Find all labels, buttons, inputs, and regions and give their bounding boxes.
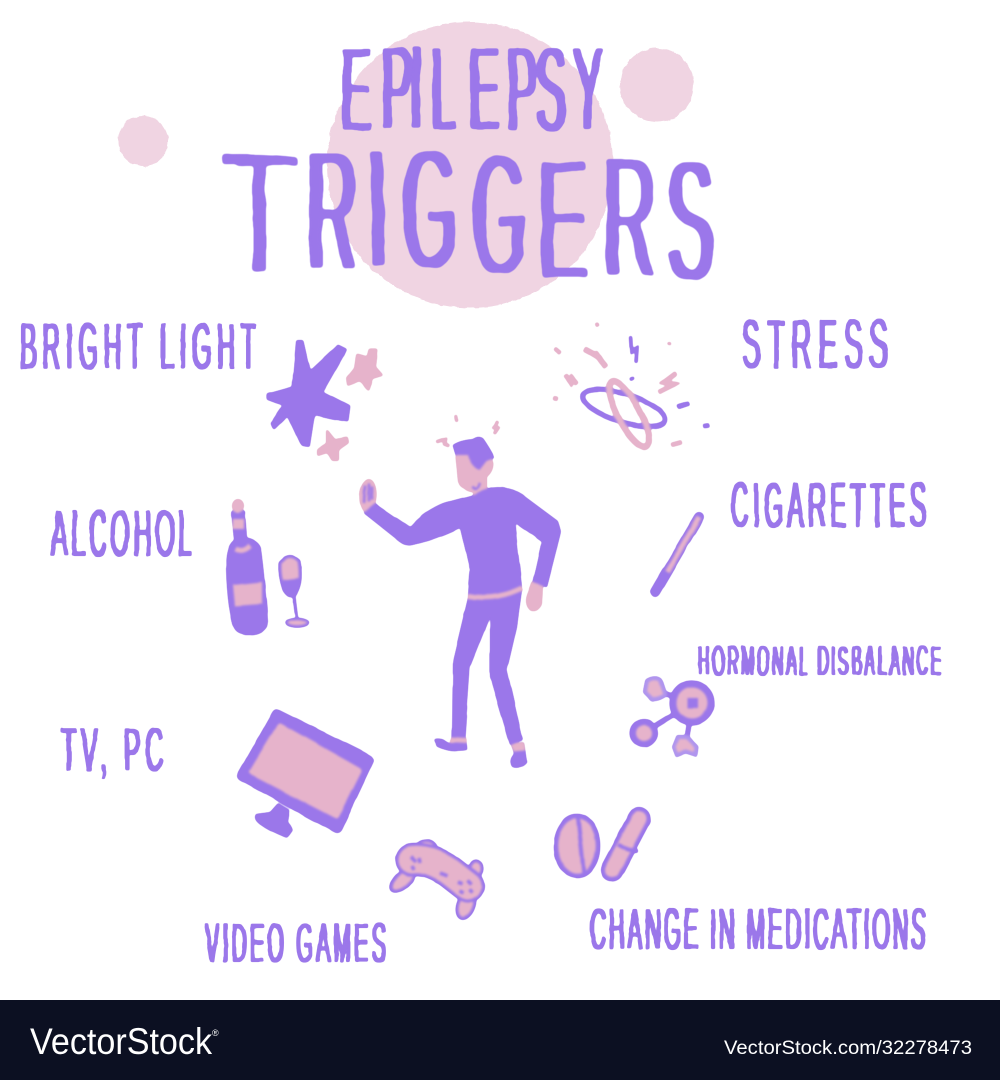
label: hormonal disbalance: HORMONAL DISBALANCE [698, 637, 941, 684]
icon: cigarette [655, 517, 699, 592]
icon: game controller [387, 841, 482, 921]
watermark footer bar [0, 1000, 1000, 1080]
hands [358, 478, 378, 514]
belt [468, 588, 522, 597]
label: tv, pc: TV, PC [61, 716, 163, 785]
label: cigarettes: CIGARETTES [731, 470, 926, 542]
label: alcohol: ALCOHOL [51, 497, 192, 571]
shirt [363, 487, 561, 595]
label: video games: VIDEO GAMES [205, 912, 386, 974]
icon: wine bottle [226, 499, 268, 635]
hair [452, 437, 495, 470]
trousers [452, 590, 523, 745]
icon: tv monitor [242, 714, 369, 838]
watermark footer bar: ® [212, 1028, 219, 1038]
icon: hormone molecule [633, 678, 711, 755]
face and neck [455, 445, 493, 497]
icon: dizzy sparks above head [436, 415, 498, 446]
icon: stress lightning and rings [553, 323, 710, 452]
label: change in medications: CHANGE IN MEDICATIONS [590, 897, 926, 962]
icon: bright light star [268, 341, 382, 460]
label: stress: STRESS [742, 306, 888, 384]
title [226, 22, 714, 317]
watermark footer bar: VectorStock [30, 1021, 212, 1062]
watermark footer bar: VectorStock.com/32278473 [724, 1037, 972, 1059]
person figure [358, 437, 561, 768]
icon: wine glass [280, 557, 308, 627]
title: TRIGGERS [238, 112, 714, 317]
shoes [434, 738, 467, 751]
icon: medication pills [556, 816, 639, 876]
decorative circles behind title [118, 22, 694, 308]
label: bright light: BRIGHT LIGHT [20, 310, 256, 384]
title: EPILEPSY [341, 22, 603, 157]
